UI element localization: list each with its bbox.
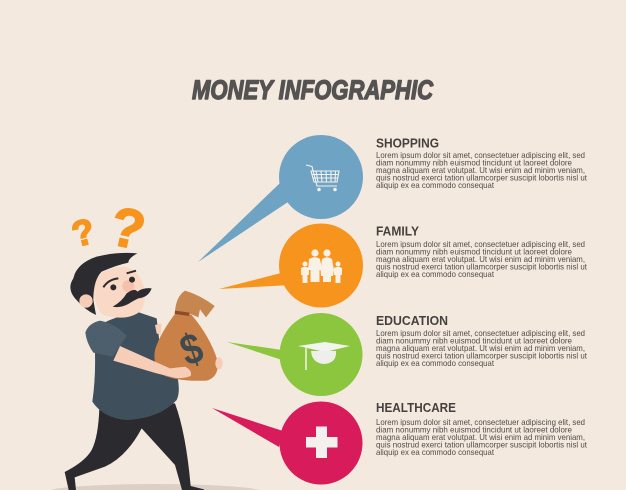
character with money bag [65, 253, 223, 490]
text block: education: aliquip ex ea commodo consequat [376, 358, 495, 368]
text block: healthcare: quis nostrud exerci tation ullamcorper suscipit lobortis nisl ut [376, 440, 588, 450]
icon: medical cross [306, 426, 338, 458]
text block: healthcare: Lorem ipsum dolor sit amet, consectetuer adipiscing elit, sed [376, 417, 585, 427]
question marks [67, 194, 151, 262]
moustache [113, 288, 152, 307]
text block: healthcare: aliquip ex ea commodo consequat [376, 447, 495, 457]
text block: family: aliquip ex ea commodo consequat [376, 269, 495, 279]
text block: healthcare: magna aliquam erat volutpat. Ut wisi enim ad minim veniam, [376, 432, 585, 442]
text block: shopping: quis nostrud exerci tation ullamcorper suscipit lobortis nisl ut [376, 172, 588, 182]
question marks: ? [104, 194, 151, 262]
text block: shopping: aliquip ex ea commodo consequat [376, 180, 495, 190]
icon: shopping cart [306, 165, 339, 191]
text block: education: EDUCATION [376, 313, 448, 328]
text block: education [376, 313, 588, 368]
text block: healthcare: diam nonummy nibh euismod tincidunt ut laoreet dolore [376, 424, 572, 434]
ear [79, 294, 93, 308]
legs [65, 403, 204, 490]
front arm [113, 346, 191, 378]
eyes and brows [110, 284, 116, 290]
text block: family: magna aliquam erat volutpat. Ut wisi enim ad minim veniam, [376, 254, 585, 264]
text block: shopping: magna aliquam erat volutpat. Ut wisi enim ad minim veniam, [376, 165, 585, 175]
text block: family: FAMILY [376, 224, 419, 238]
text block: family: quis nostrud exerci tation ullamcorper suscipit lobortis nisl ut [376, 262, 588, 272]
hair [70, 253, 137, 315]
money bag [154, 291, 223, 381]
text block: family: diam nonummy nibh euismod tincidunt ut laoreet dolore [376, 246, 572, 256]
text block: family [376, 224, 588, 279]
back hand [155, 323, 162, 335]
text block: healthcare: HEALTHCARE [376, 400, 456, 415]
torso [92, 312, 179, 420]
icon: family [301, 249, 342, 283]
question marks: ? [67, 210, 99, 255]
text block: shopping [376, 136, 588, 190]
text block: family: Lorem ipsum dolor sit amet, consectetuer adipiscing elit, sed [376, 239, 585, 249]
ground shadow [47, 484, 263, 490]
sleeve [85, 321, 127, 357]
panel: education bubble [227, 313, 362, 396]
money bag: $ [174, 324, 209, 376]
text block: shopping: Lorem ipsum dolor sit amet, consectetuer adipiscing elit, sed [376, 150, 585, 160]
icon: graduation cap [298, 342, 350, 370]
text block: shopping: diam nonummy nibh euismod tincidunt ut laoreet dolore [376, 158, 572, 168]
title: MONEY INFOGRAPHIC [192, 75, 433, 105]
panel: shopping bubble [198, 135, 363, 262]
text block: education: Lorem ipsum dolor sit amet, consectetuer adipiscing elit, sed [376, 328, 585, 338]
head [70, 253, 152, 318]
text block: education: diam nonummy nibh euismod tincidunt ut laoreet dolore [376, 336, 572, 346]
panel: family bubble [219, 224, 363, 308]
text block: healthcare [376, 400, 588, 457]
text block: shopping: SHOPPING [376, 136, 439, 150]
text block: education: quis nostrud exerci tation ullamcorper suscipit lobortis nisl ut [376, 350, 588, 360]
panel: healthcare bubble [212, 402, 362, 484]
text block: education: magna aliquam erat volutpat. Ut wisi enim ad minim veniam, [376, 343, 585, 353]
